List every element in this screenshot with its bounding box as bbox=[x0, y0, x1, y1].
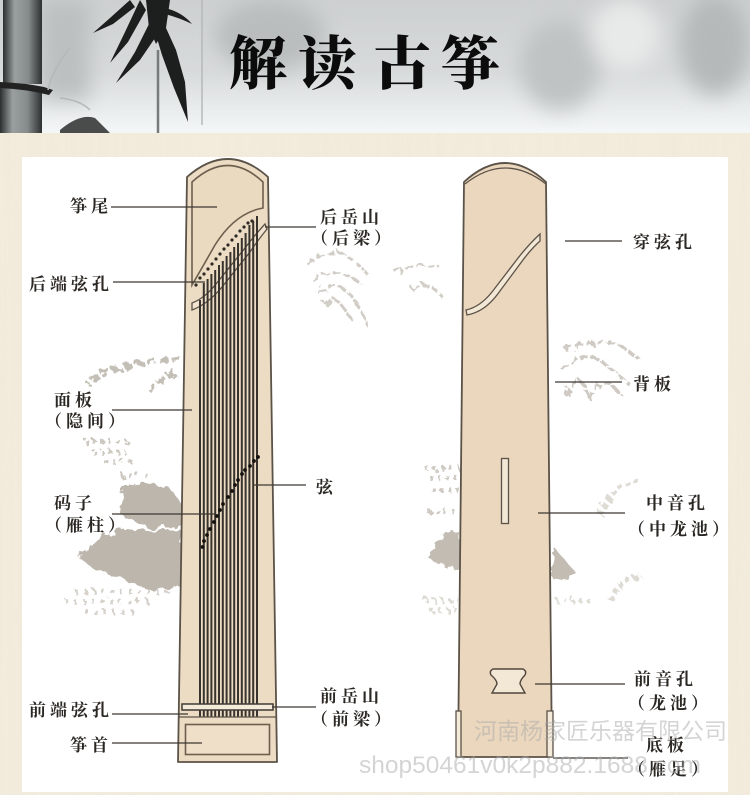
label: back board: 背板 bbox=[633, 374, 675, 394]
strings bbox=[200, 216, 257, 717]
label: face board bbox=[45, 390, 192, 431]
tail panel bbox=[192, 166, 263, 285]
bamboo leaves bbox=[93, 0, 192, 122]
body bbox=[458, 163, 552, 757]
title: 筝 bbox=[441, 32, 499, 97]
zheng back view bbox=[456, 163, 553, 757]
label: base board: 底板 bbox=[646, 735, 688, 755]
middle sound hole bbox=[502, 458, 508, 524]
label: rear bridge bbox=[265, 208, 395, 248]
label: front bridge: （前梁） bbox=[311, 709, 395, 729]
label: threading holes: 穿弦孔 bbox=[633, 232, 696, 252]
title bbox=[230, 34, 499, 90]
front bridge bbox=[182, 704, 273, 710]
bamboo trunk bbox=[0, 0, 53, 133]
front sound hole bbox=[490, 669, 526, 693]
label: bridges bbox=[45, 494, 215, 535]
label: zheng head: 筝首 bbox=[70, 736, 112, 755]
white panel bbox=[22, 157, 728, 792]
bridges bbox=[201, 455, 260, 549]
watermark: 河南杨家匠乐器有限公司 bbox=[474, 718, 727, 744]
label: strings bbox=[253, 478, 337, 497]
zheng front view bbox=[178, 159, 277, 762]
header banner bbox=[0, 0, 750, 133]
misty mountains bbox=[40, 0, 750, 110]
ink: right tree bbox=[425, 468, 640, 610]
watermark bbox=[359, 718, 727, 779]
label: face board: （隐间） bbox=[45, 412, 129, 431]
feet bbox=[456, 711, 553, 757]
ink: left tree bbox=[65, 358, 182, 612]
label: middle sound hole bbox=[538, 494, 733, 539]
label: front sound hole bbox=[535, 670, 712, 713]
label: bridges: （雁柱） bbox=[45, 515, 129, 535]
watermark: shop50461v0k2p882.1688.com bbox=[359, 752, 701, 779]
label: rear string holes: 后端弦孔 bbox=[29, 274, 113, 294]
ink painting background bbox=[65, 252, 640, 612]
string slot bbox=[466, 234, 540, 315]
label: front bridge: 前岳山 bbox=[320, 687, 383, 706]
label: face board: 面板 bbox=[54, 390, 96, 410]
label: front string holes: 前端弦孔 bbox=[29, 700, 113, 720]
body bbox=[178, 159, 277, 762]
rear bridge bbox=[192, 224, 267, 310]
label: front sound hole: 前音孔 bbox=[634, 670, 697, 689]
head panel bbox=[186, 724, 270, 754]
label: rear bridge: 后岳山 bbox=[320, 208, 383, 227]
title: 解 bbox=[229, 32, 287, 97]
ink: right mountains bbox=[562, 342, 640, 400]
label: zheng head bbox=[70, 736, 202, 755]
label: zheng tail: 筝尾 bbox=[70, 197, 112, 216]
label: base board: （雁足） bbox=[628, 759, 712, 779]
label: front bridge bbox=[272, 687, 395, 729]
label: bridges: 码子 bbox=[54, 494, 96, 513]
ink: centre mountains bbox=[308, 252, 445, 330]
label: base board bbox=[553, 735, 712, 779]
title: 读 bbox=[298, 32, 359, 97]
label: rear bridge: （后梁） bbox=[311, 228, 395, 248]
label: front sound hole: （龙池） bbox=[628, 693, 712, 713]
label: threading holes bbox=[565, 232, 696, 252]
label: middle sound hole: （中龙池） bbox=[628, 519, 733, 539]
label: middle sound hole: 中音孔 bbox=[646, 494, 709, 513]
string holes bbox=[194, 219, 254, 287]
label: strings: 弦 bbox=[316, 478, 337, 497]
label: back board bbox=[555, 374, 675, 394]
title: 古 bbox=[373, 32, 431, 97]
